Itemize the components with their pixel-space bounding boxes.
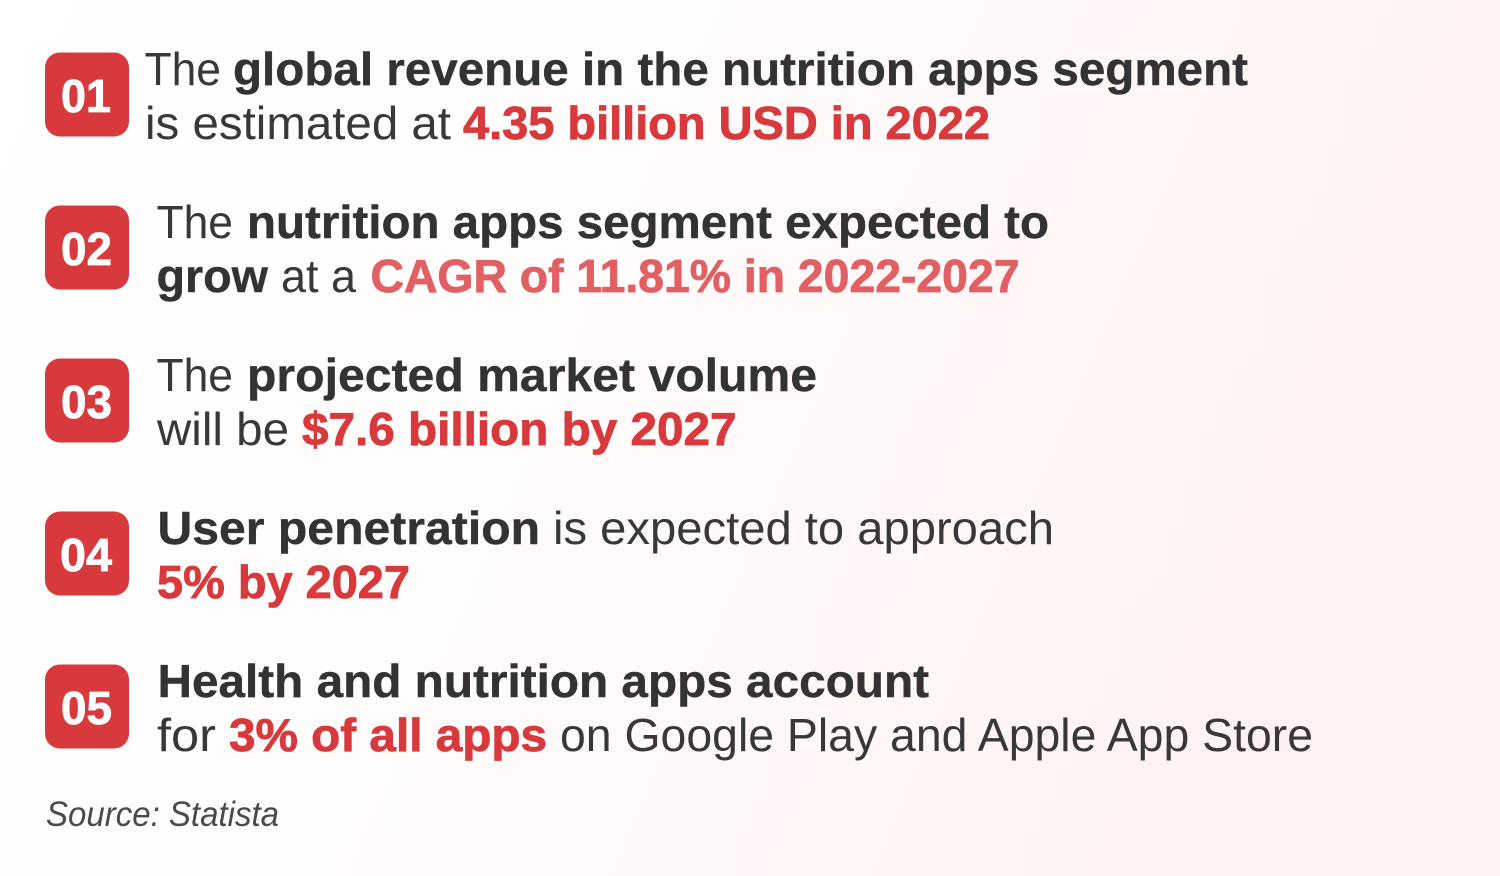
item 02 text: CAGR of 11.81% in 2022-2027 [370, 250, 1020, 302]
item 01 text: is estimated at [145, 97, 451, 149]
badge 02 [45, 206, 129, 290]
badge 03 [45, 358, 129, 442]
item 03 text: will be [156, 403, 289, 455]
badge 01 [45, 52, 129, 136]
item 05 text: for [157, 709, 216, 761]
badge 04: 04 [60, 529, 112, 581]
badge 01: 01 [61, 70, 111, 122]
badge 03: 03 [61, 376, 112, 428]
item 02 text: at a [281, 250, 356, 302]
item 02 text: grow [156, 250, 268, 302]
badge 05: 05 [61, 682, 112, 734]
item 02 [45, 196, 1049, 302]
item 04 text: 5% by 2027 [157, 556, 410, 608]
item 01 text: The [144, 43, 221, 95]
item 04 [45, 502, 1054, 608]
item 01 [45, 43, 1248, 149]
source note: Source: Statista [46, 795, 279, 834]
item 03 text [156, 349, 817, 455]
item 01 text: global revenue in the nutrition apps segment [233, 43, 1248, 95]
item 05 text: Health and nutrition apps account [158, 655, 929, 707]
item 03 [45, 349, 817, 455]
item 02 text: nutrition apps segment expected to [247, 196, 1049, 248]
item 03 text: projected market volume [247, 349, 817, 401]
item 01 text: 4.35 billion USD in 2022 [463, 97, 990, 149]
badge 04 [45, 512, 129, 596]
item 05 text: on Google Play and Apple App Store [560, 709, 1313, 761]
item 05 [45, 655, 1313, 761]
item 04 text: User penetration [158, 502, 540, 554]
item 02 text: The [156, 196, 233, 248]
item 03 text: The [156, 349, 233, 401]
item 01 text [144, 43, 1248, 149]
item 02 text [156, 196, 1049, 302]
item 04 text [157, 502, 1054, 608]
item 05 text: 3% of all apps [229, 709, 547, 761]
badge 02: 02 [61, 223, 112, 275]
item 03 text: $7.6 billion by 2027 [302, 403, 736, 455]
item 04 text: is expected to approach [553, 502, 1054, 554]
badge 05 [45, 664, 129, 748]
item 05 text [157, 655, 1313, 761]
